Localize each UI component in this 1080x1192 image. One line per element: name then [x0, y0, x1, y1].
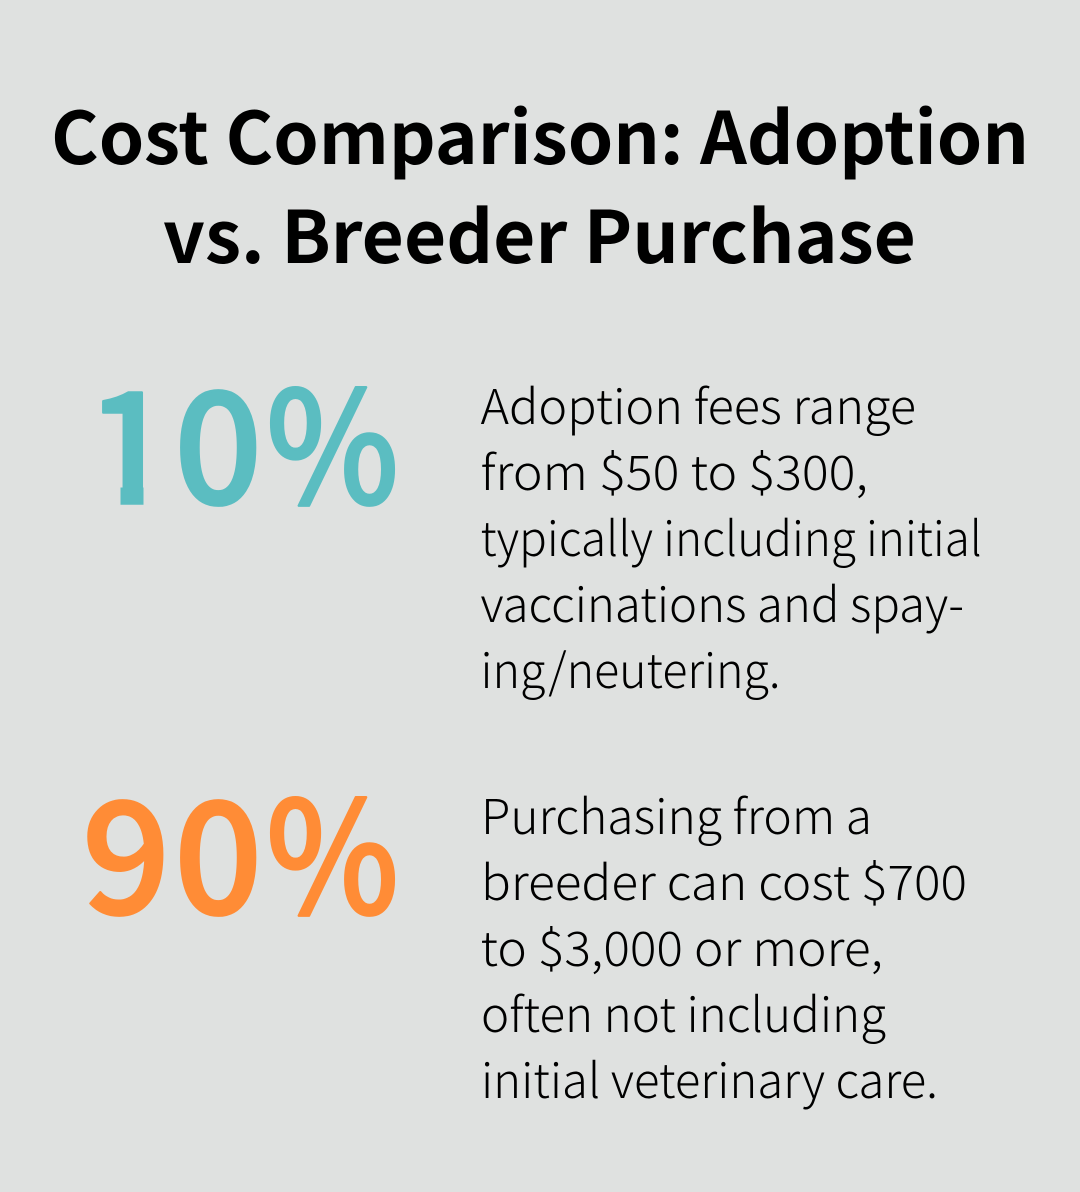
- text block: breeder cost: often not including: [481, 976, 886, 1046]
- stat: 10%: 1: [86, 324, 174, 548]
- text block: breeder cost: breeder can cost $700: [481, 844, 967, 914]
- text block: breeder cost: Purchasing from a: [481, 778, 872, 848]
- panel: adoption statistic: [86, 324, 982, 702]
- title: Cost Comparison: Adoption: [51, 80, 1029, 185]
- panel: breeder statistic: [82, 734, 967, 1112]
- title: [51, 80, 1029, 284]
- text block: breeder cost: initial veterinary care.: [481, 1042, 938, 1112]
- stat: 90%: 0: [174, 734, 262, 958]
- stat: 10%: [86, 324, 399, 548]
- text block: adoption fees: [480, 368, 982, 702]
- text block: adoption fees: Adoption fees range: [480, 368, 916, 438]
- stat: 10%: 0: [174, 324, 262, 548]
- text block: breeder cost: to $3,000 or more,: [480, 910, 883, 980]
- text block: adoption fees: from $50 to $300,: [480, 434, 868, 504]
- title: vs. Breeder Purchase: [163, 179, 916, 284]
- text block: adoption fees: ing/neutering.: [480, 632, 780, 702]
- stat: 10%: %: [266, 324, 399, 548]
- text block: adoption fees: vaccinations and spay-: [480, 566, 964, 636]
- stat: 90%: 9: [82, 734, 170, 958]
- stat: 90%: %: [266, 734, 399, 958]
- stat: 90%: [82, 734, 399, 958]
- text block: adoption fees: typically including initial: [480, 500, 982, 570]
- text block: breeder cost: [480, 778, 967, 1112]
